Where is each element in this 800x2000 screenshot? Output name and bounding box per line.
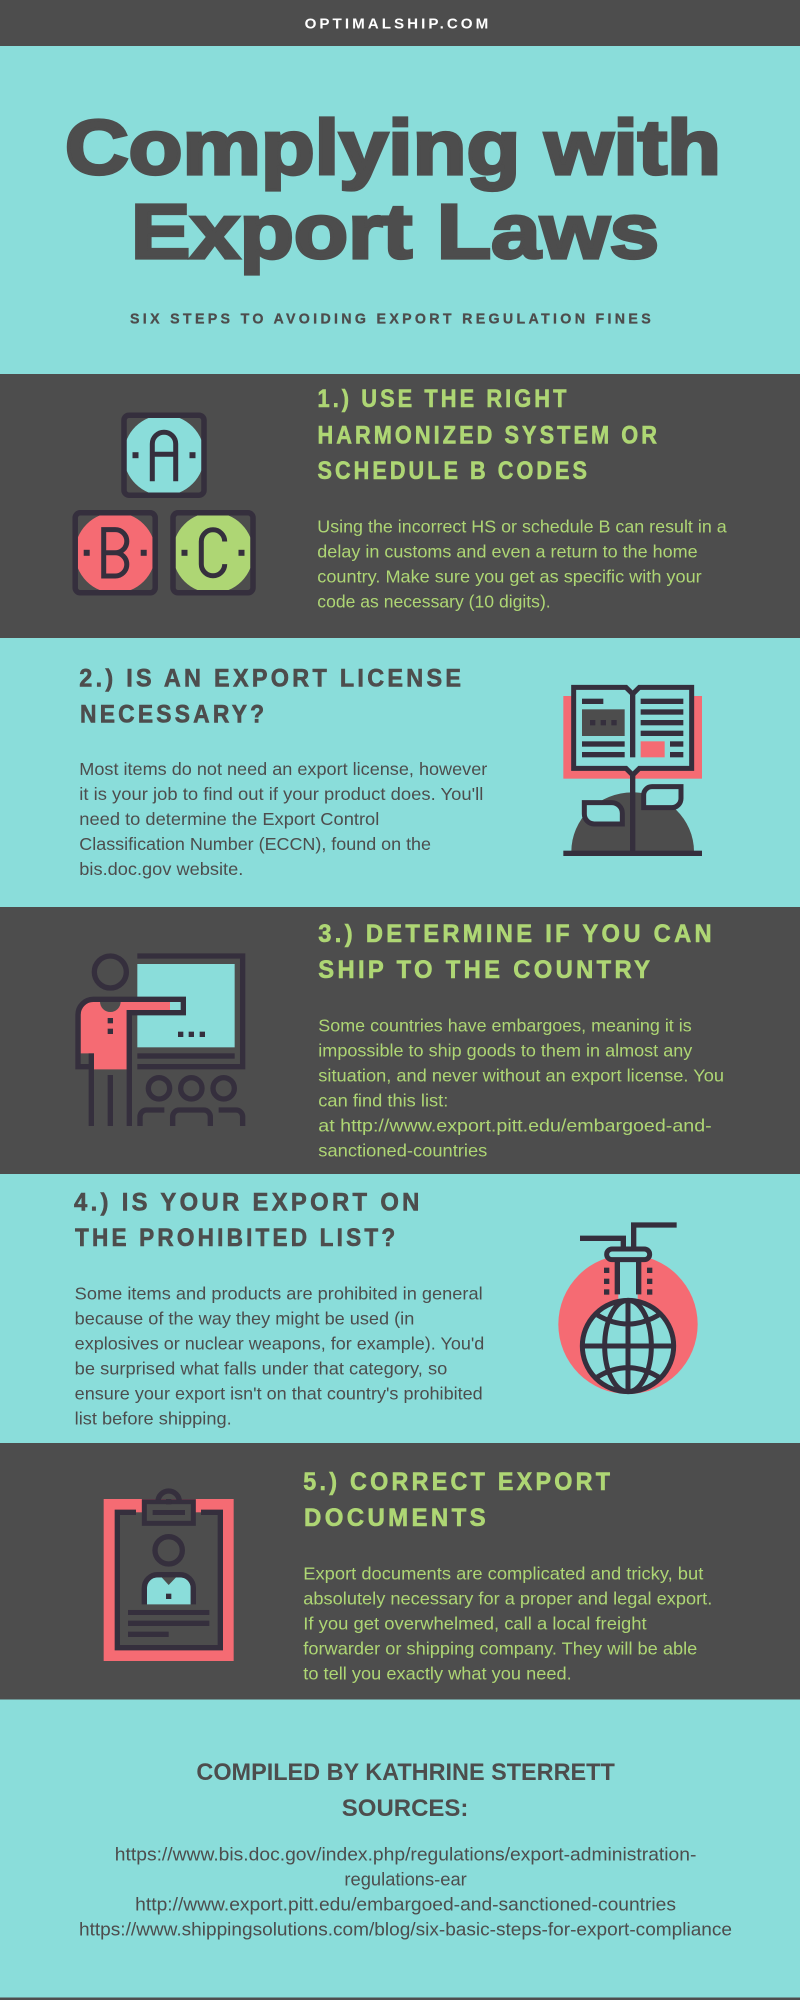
site name: OPTIMALSHIP.COM <box>305 15 491 32</box>
heading: step 2 <box>79 664 464 728</box>
text: step 4: Some items and products are prohibited in general <box>75 1283 483 1303</box>
title: Export Laws <box>131 189 659 275</box>
panel: step 4 <box>74 1189 698 1428</box>
text: step 3: sanctioned-countries <box>318 1140 488 1160</box>
icon: globe <box>558 1225 698 1394</box>
text: step 5: absolutely necessary for a proper and legal export. <box>303 1588 712 1608</box>
panel: step 3 <box>0 907 800 1174</box>
text: step 3: at http://www.export.pitt.edu/embargoed-and- <box>318 1115 712 1135</box>
heading: step 1: HARMONIZED SYSTEM OR <box>318 421 660 449</box>
text: step 4 <box>75 1283 484 1428</box>
text: step 3: Some countries have embargoes, meaning it is <box>318 1015 692 1035</box>
footer strip <box>0 1998 800 2000</box>
text: step 4: explosives or nuclear weapons, for example). You'd <box>75 1333 484 1353</box>
heading: step 5 <box>303 1468 613 1532</box>
text: step 2: Classification Number (ECCN), found on the <box>79 834 431 854</box>
text: step 3: can find this list: <box>318 1090 448 1110</box>
panel: credits and sources <box>79 1759 732 1940</box>
header bar <box>0 0 800 46</box>
text: step 1: code as necessary (10 digits). <box>317 591 551 611</box>
heading: step 3: SHIP TO THE COUNTRY <box>318 956 653 984</box>
panel: step 2 <box>79 664 702 879</box>
text: step 3: situation, and never without an export license. You <box>318 1065 724 1085</box>
source links: https://www.shippingsolutions.com/blog/six-basic-steps-for-export-compliance <box>79 1920 732 1940</box>
heading: step 2: 2.) IS AN EXPORT LICENSE <box>79 664 464 692</box>
text: step 1: Using the incorrect HS or schedule B can result in a <box>317 516 727 536</box>
text: step 5: to tell you exactly what you need. <box>303 1663 572 1683</box>
text: step 2: it is your job to find out if your product does. You'll <box>79 784 483 804</box>
heading: step 3 <box>318 920 715 984</box>
text: step 3 <box>318 1015 724 1160</box>
title block <box>65 105 721 327</box>
text: step 2: need to determine the Export Control <box>79 809 379 829</box>
panel: step 1 <box>0 374 800 638</box>
heading: step 1 <box>318 385 660 485</box>
text: step 1 <box>317 516 727 611</box>
text: step 2 <box>79 759 487 879</box>
credits heading: COMPILED BY KATHRINE STERRETT <box>196 1759 615 1786</box>
source links: https://www.bis.doc.gov/index.php/regulations/export-administration- <box>115 1845 696 1865</box>
heading: step 4: THE PROHIBITED LIST? <box>75 1224 398 1252</box>
text: step 2: Most items do not need an export license, however <box>79 759 487 779</box>
text: step 5: Export documents are complicated and tricky, but <box>303 1563 703 1583</box>
text: step 5: If you get overwhelmed, call a local freight <box>303 1613 647 1633</box>
icon: clipboard <box>104 1491 234 1661</box>
text: step 5: forwarder or shipping company. They will be able <box>303 1638 697 1658</box>
heading: step 1: 1.) USE THE RIGHT <box>318 385 570 413</box>
credits heading: SOURCES: <box>342 1795 468 1822</box>
icon: ABC blocks <box>75 415 253 593</box>
source links <box>79 1845 732 1940</box>
heading: step 3: 3.) DETERMINE IF YOU CAN <box>318 920 715 948</box>
source links: http://www.export.pitt.edu/embargoed-and-sanctioned-countries <box>135 1895 676 1915</box>
text: step 3: impossible to ship goods to them in almost any <box>318 1040 693 1060</box>
title <box>65 105 721 275</box>
text: step 4: ensure your export isn't on that country's prohibited <box>75 1383 483 1403</box>
title: Complying with <box>65 105 721 191</box>
text: step 4: list before shipping. <box>75 1408 232 1428</box>
text: step 2: bis.doc.gov website. <box>79 859 243 879</box>
heading: step 5: DOCUMENTS <box>304 1504 489 1532</box>
icon: presenter <box>78 956 243 1126</box>
text: step 4: be surprised what falls under that category, so <box>75 1358 447 1378</box>
heading: step 4 <box>74 1189 423 1252</box>
text: step 4: because of the way they might be used (in <box>75 1308 414 1328</box>
subtitle: SIX STEPS TO AVOIDING EXPORT REGULATION FINES <box>130 310 654 327</box>
heading: step 4: 4.) IS YOUR EXPORT ON <box>74 1189 423 1217</box>
icon: book plant <box>563 687 702 856</box>
text: step 1: country. Make sure you get as specific with your <box>317 566 702 586</box>
panel: step 5 <box>0 1443 800 1700</box>
heading: step 5: 5.) CORRECT EXPORT <box>303 1468 613 1496</box>
text: step 1: delay in customs and even a return to the home <box>317 541 698 561</box>
heading: step 2: NECESSARY? <box>80 700 267 728</box>
source links: regulations-ear <box>344 1870 467 1890</box>
heading: step 1: SCHEDULE B CODES <box>318 457 590 485</box>
credits heading <box>196 1759 615 1822</box>
text: step 5 <box>303 1563 712 1683</box>
